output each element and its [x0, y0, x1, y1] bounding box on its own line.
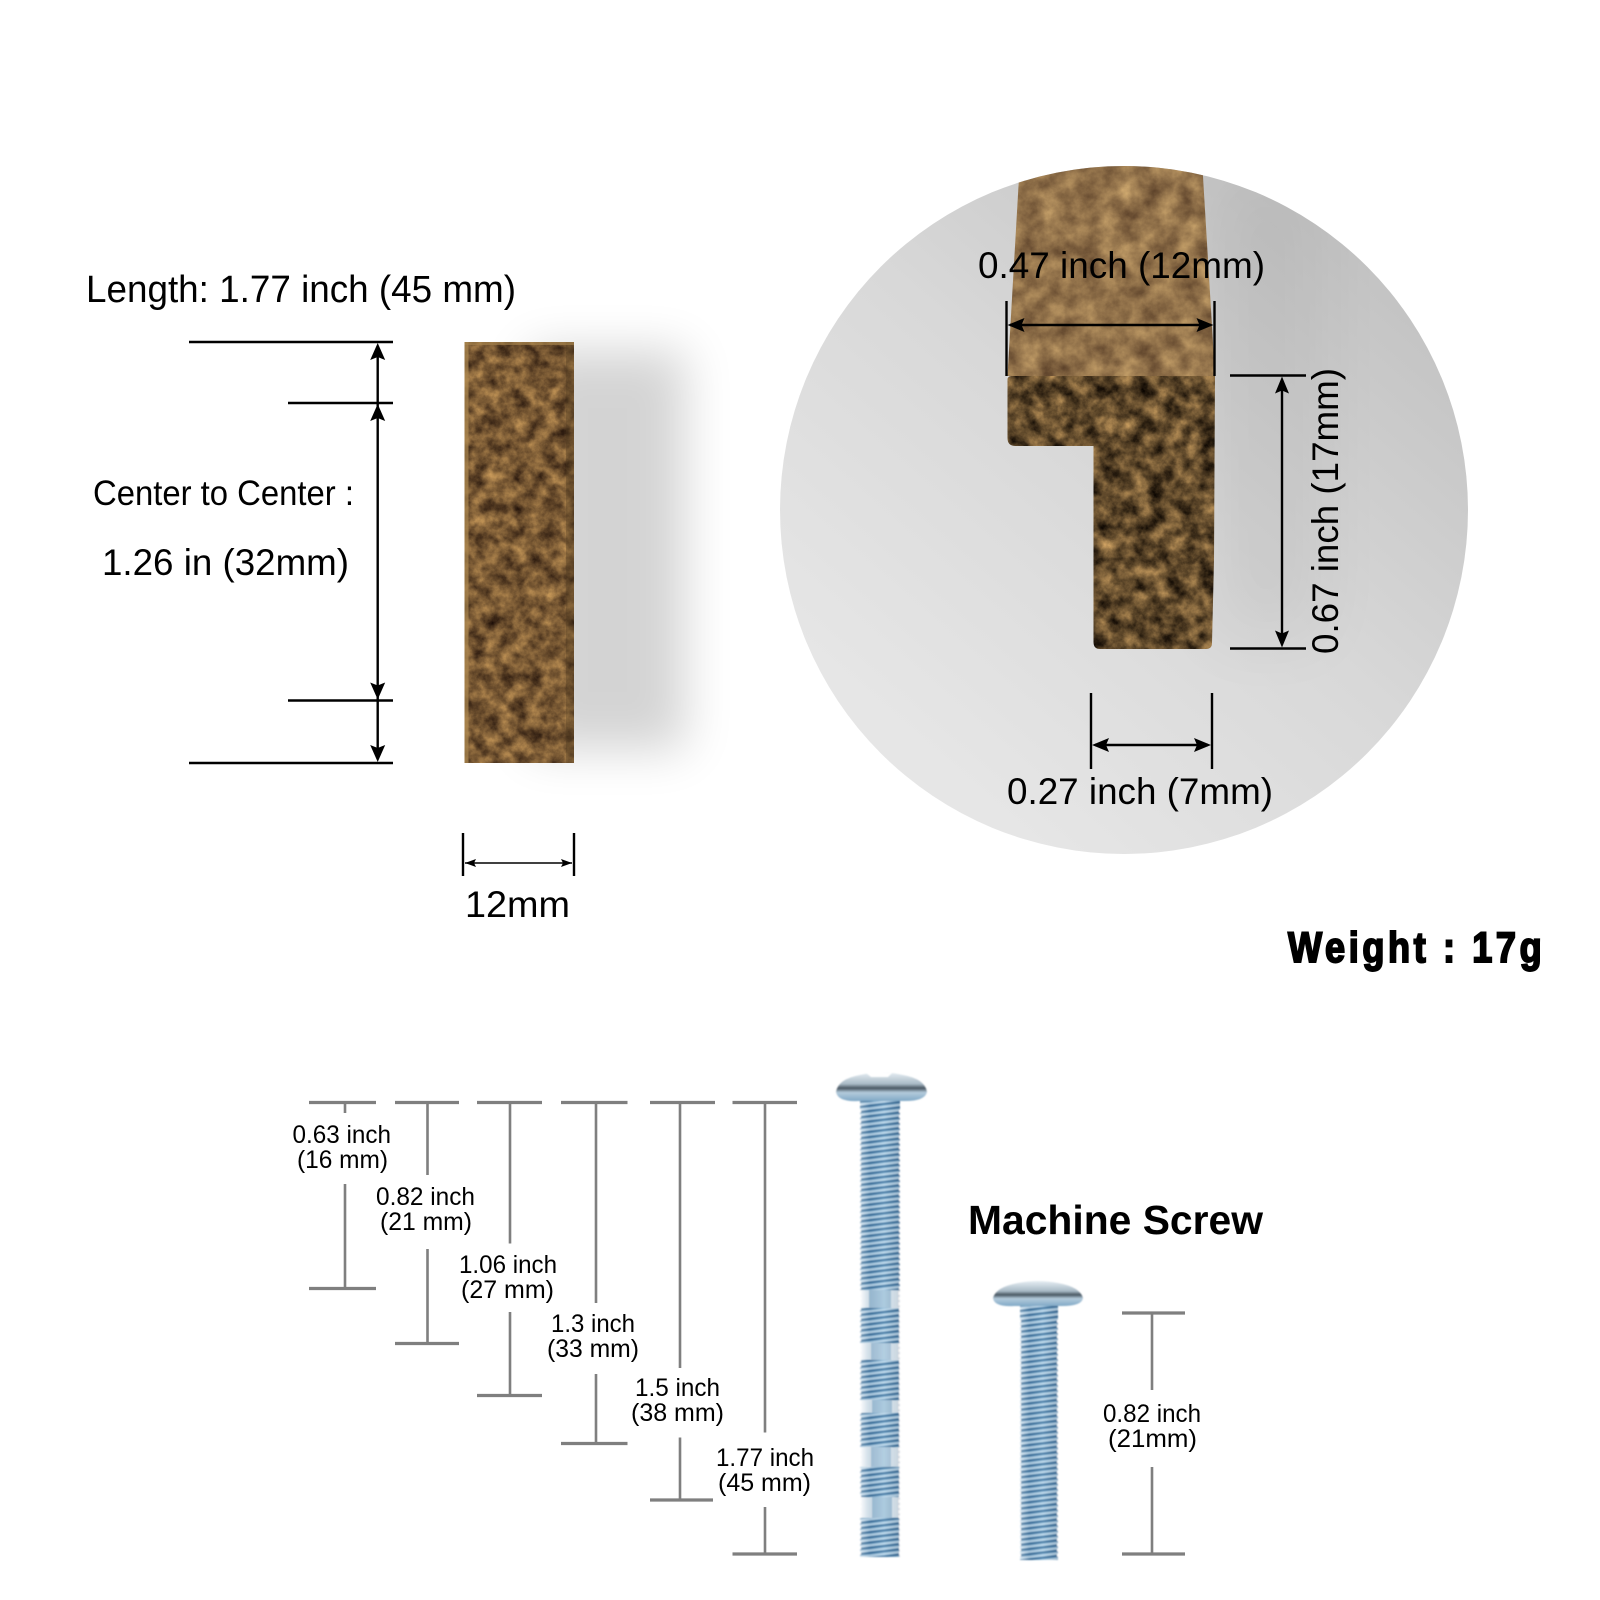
- short machine screw: [993, 1281, 1083, 1560]
- vertical dimension lines and arrows: [189, 342, 393, 763]
- weight label: Weight : 17g: [1288, 924, 1542, 972]
- dimension short screw 0.82 inch: 0.82 inch: [1103, 1400, 1201, 1428]
- long breakaway screw: [836, 1072, 927, 1557]
- dimension 1.3 inch: 1.3 inch: [551, 1310, 635, 1338]
- dimension 1.06 inch: (27 mm): [461, 1276, 554, 1304]
- dimension 0.67 inch: [1230, 368, 1346, 654]
- dimension 0.63 inch: [292, 1102, 391, 1288]
- center to center label: Center to Center :: [93, 474, 354, 513]
- dimension 1.77 inch: (45 mm): [718, 1469, 811, 1497]
- dimension 0.67 inch: 0.67 inch (17mm): [1305, 368, 1346, 654]
- panel: screw length options: [292, 1072, 1263, 1560]
- dimension 0.82 inch: [376, 1102, 475, 1344]
- infographic canvas: [89, 166, 1540, 1562]
- dimension 1.77 inch: [716, 1102, 814, 1554]
- dimension 0.82 inch: 0.82 inch: [376, 1183, 475, 1211]
- dimension 0.82 inch: (21 mm): [380, 1208, 472, 1236]
- dimension 0.63 inch: (16 mm): [297, 1146, 388, 1174]
- machine screw label: Machine Screw: [968, 1197, 1263, 1243]
- dimension 1.3 inch: [547, 1102, 639, 1444]
- dimension 1.06 inch: 1.06 inch: [459, 1251, 557, 1279]
- length label: Length: 1.77 inch (45 mm): [86, 269, 516, 311]
- handle L-shaped end face: [1008, 376, 1215, 649]
- panel: front view of handle with length dimensions: [86, 269, 685, 925]
- center to center label: 1.26 in (32mm): [102, 542, 349, 583]
- handle cast shadow in circle: [1231, 207, 1303, 614]
- dimension 0.47 inch: [978, 245, 1265, 376]
- dimension short screw 0.82 inch: [1103, 1313, 1201, 1554]
- panel: circular end view of handle: [780, 160, 1468, 854]
- width bracket 12mm: [463, 833, 574, 925]
- dimension 1.5 inch: (38 mm): [631, 1399, 724, 1427]
- dimension 0.47 inch: 0.47 inch (12mm): [978, 245, 1265, 286]
- bronze handle front view: [464, 342, 574, 763]
- width bracket 12mm: 12mm: [465, 884, 570, 925]
- dimension 1.77 inch: 1.77 inch: [716, 1444, 814, 1472]
- dimension 1.5 inch: [631, 1102, 724, 1500]
- dimension 1.5 inch: 1.5 inch: [635, 1374, 720, 1402]
- dimension 1.3 inch: (33 mm): [547, 1335, 639, 1363]
- dimension 1.06 inch: [459, 1102, 557, 1396]
- dimension short screw 0.82 inch: (21mm): [1108, 1425, 1197, 1453]
- center to center label: [93, 474, 354, 583]
- dimension 0.63 inch: 0.63 inch: [292, 1121, 391, 1149]
- handle top surface: [1008, 160, 1215, 376]
- dimension 0.27 inch: [1007, 693, 1273, 812]
- product shadow: [530, 350, 685, 750]
- dimension 0.27 inch: 0.27 inch (7mm): [1007, 771, 1273, 812]
- grey circle background: [780, 166, 1468, 854]
